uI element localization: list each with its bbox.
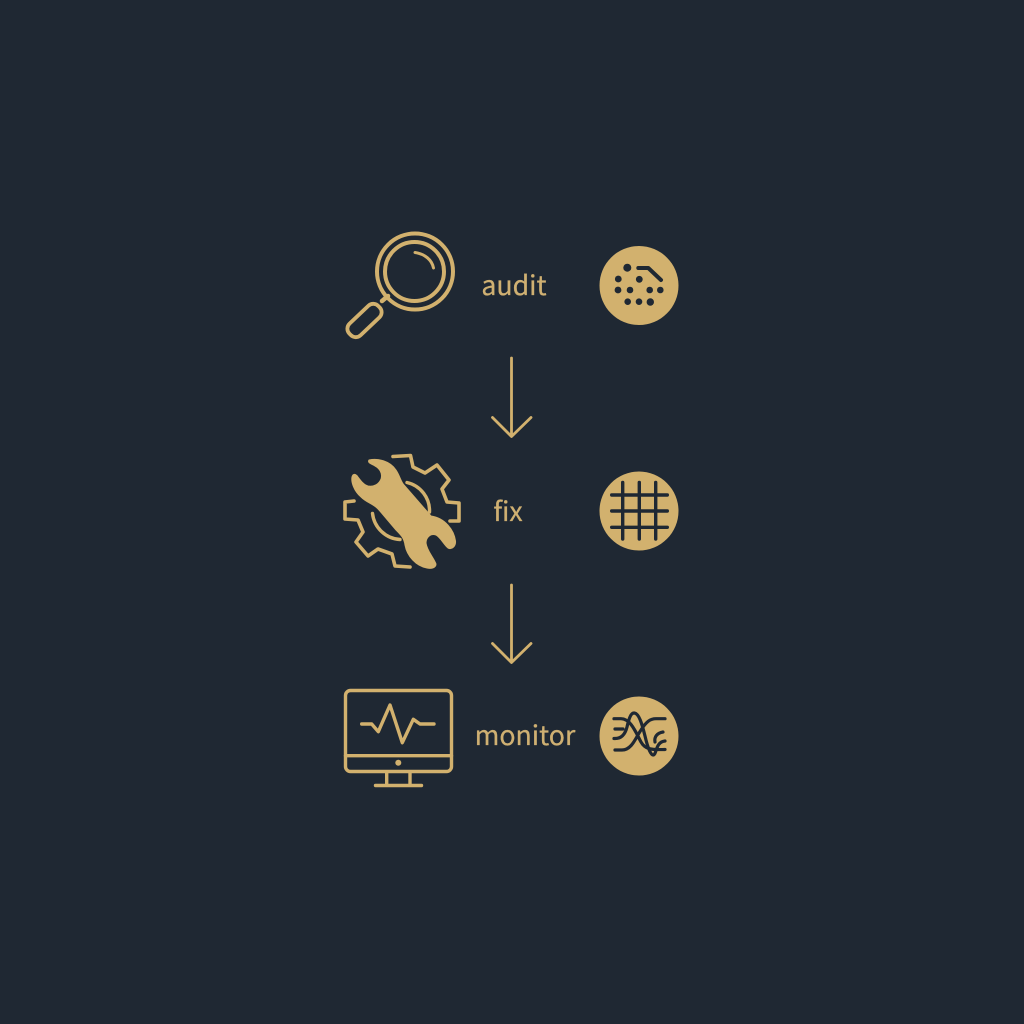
label: monitor: monitor bbox=[475, 714, 576, 753]
icon: wrench and gear bbox=[345, 456, 459, 568]
badge: grid bbox=[600, 472, 678, 550]
label: fix: fix bbox=[493, 490, 523, 529]
arrow: fix to monitor bbox=[492, 585, 531, 662]
icon: monitor with pulse bbox=[346, 690, 452, 786]
badge: dots and line bbox=[600, 246, 678, 325]
icon: magnifying glass bbox=[344, 234, 453, 340]
label: audit: audit bbox=[481, 264, 547, 303]
badge: woven strands bbox=[600, 696, 678, 776]
arrow: audit to fix bbox=[492, 358, 531, 436]
